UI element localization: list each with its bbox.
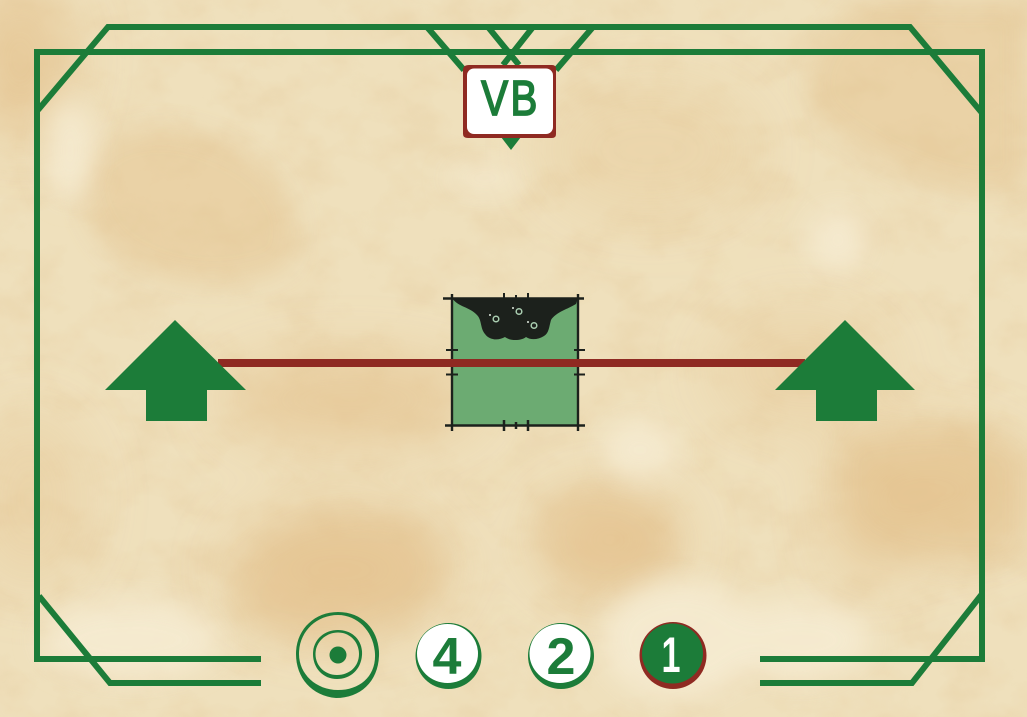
diagram: green square with black top [443,293,585,431]
badge: number 1 [640,622,706,689]
icon: right up arrow [775,320,915,421]
icon: small pointer under badge [501,137,521,150]
badge: number 2 [528,623,594,689]
badge white panel [467,68,553,134]
red horizontal line [218,359,805,367]
badge: number 2: 2 [547,628,575,686]
green square [452,298,578,425]
stain holes [493,309,537,328]
badge: number 4 [416,623,482,689]
icon: target rings [296,612,379,698]
badge: number 1: 1 [662,627,680,683]
badge text: VB [481,71,540,126]
icon: left up arrow [105,320,246,421]
badge: number 4: 4 [433,628,462,686]
black stain [452,298,578,340]
label: VB badge [463,65,556,150]
badge red border [463,65,556,138]
crop marks [443,293,585,431]
